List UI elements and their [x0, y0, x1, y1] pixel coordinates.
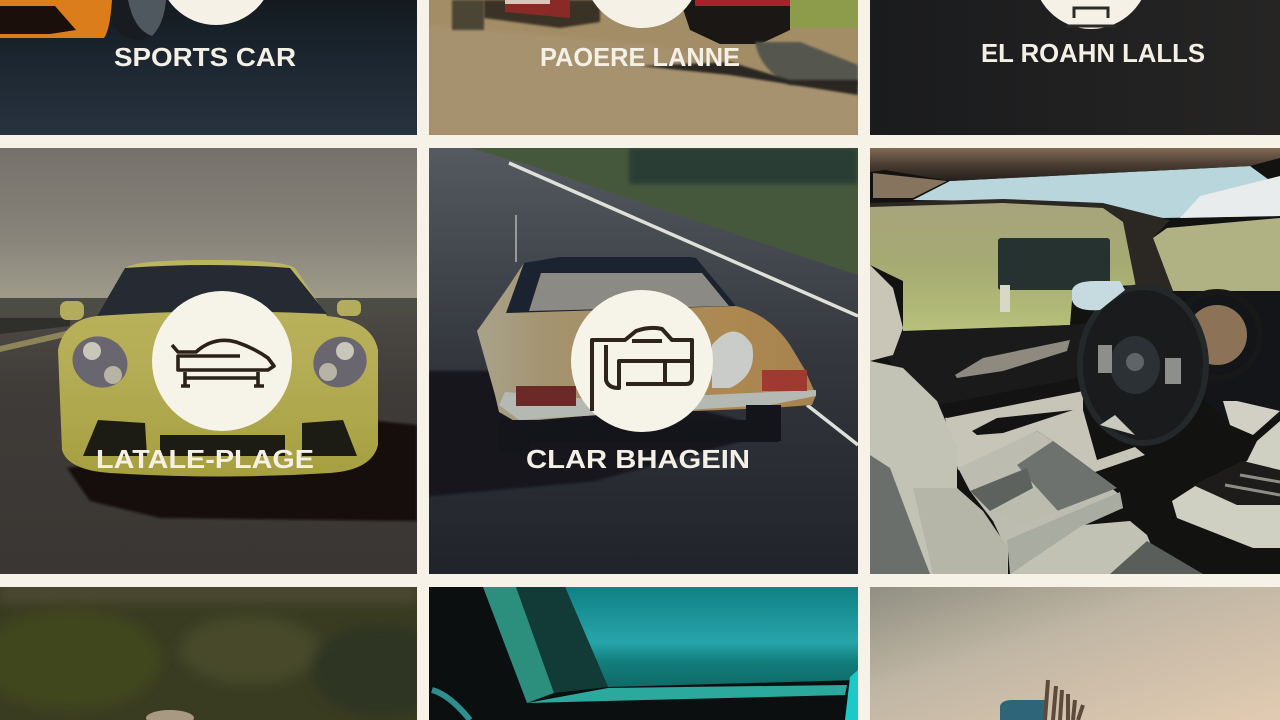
visor	[873, 173, 947, 198]
icon: white circle	[1040, 0, 1142, 29]
icon: white circle	[592, 0, 692, 28]
panel: dark tile	[870, 0, 1280, 135]
roof	[870, 148, 1280, 181]
seat	[870, 265, 1203, 574]
view: distant dark vehicle	[998, 238, 1110, 312]
road marking	[509, 163, 858, 445]
label: latale-plage: LATALE-PLAGE	[96, 444, 314, 474]
right panel	[1223, 401, 1280, 435]
icon: yellow car	[58, 260, 378, 476]
panel: dusk sky	[870, 587, 1280, 720]
vehicle top	[1000, 700, 1045, 720]
grass	[790, 0, 858, 28]
door panel	[888, 324, 1086, 404]
panel: forest	[0, 587, 450, 720]
label: dark tile: EL ROAHN LALLS	[981, 38, 1205, 68]
view: right window	[1153, 218, 1280, 291]
distant treeline	[0, 298, 417, 318]
panel: yellow sports car	[0, 148, 417, 574]
icon: circle with car outline	[152, 291, 292, 431]
label: clar bhagein: CLAR BHAGEIN	[526, 444, 750, 474]
view: sky	[913, 166, 1280, 218]
icon: circle with car outline	[571, 290, 713, 432]
shadow	[67, 421, 417, 521]
icon: red car fragment	[452, 0, 858, 95]
pillar	[870, 199, 1173, 292]
tree foliage	[0, 587, 450, 716]
panel: convertible on road	[429, 148, 858, 574]
icon: orange car fragment	[0, 0, 168, 40]
panel: car interior	[870, 148, 1280, 574]
dashboard behind wheel	[1173, 292, 1280, 425]
palm tree	[1045, 680, 1083, 720]
pale foreground spot	[146, 710, 194, 720]
icon: white circle	[168, 0, 264, 25]
icon: second wheel arc	[1194, 289, 1247, 365]
console	[1172, 421, 1280, 548]
door lower panel	[945, 391, 1145, 472]
label: racing lane: PAOERE LANNE	[540, 42, 740, 72]
view: field	[870, 201, 1137, 331]
road shadow	[429, 371, 779, 496]
label: sports car: SPORTS CAR	[114, 42, 296, 72]
darker gravel band	[429, 25, 858, 135]
icon: tan convertible	[477, 215, 816, 453]
teal pane	[565, 587, 858, 687]
panel: teal window	[429, 587, 858, 720]
antenna	[515, 215, 517, 262]
icon: steering wheel	[1080, 287, 1206, 443]
roadside grass	[470, 148, 858, 275]
mirror	[1072, 281, 1125, 310]
panel: sports car	[0, 0, 417, 135]
panel: dirt lane	[429, 0, 858, 135]
